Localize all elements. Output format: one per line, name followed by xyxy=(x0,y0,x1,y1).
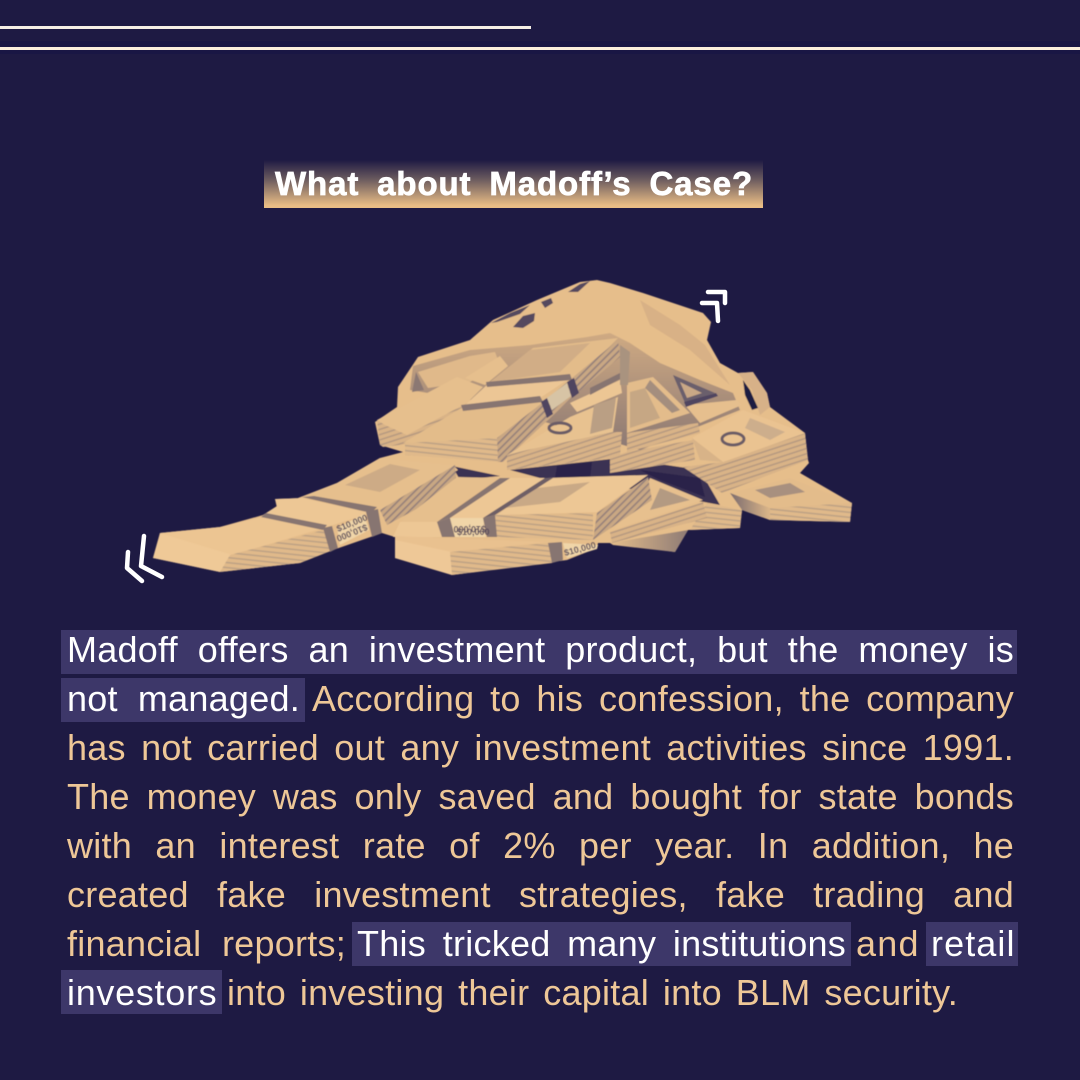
stack E behind right xyxy=(673,375,742,423)
icon: top right chevrons xyxy=(702,292,725,321)
line 2 rest: According to his confession, the company xyxy=(312,678,1014,719)
highlight line 8 xyxy=(61,970,222,1014)
body text block xyxy=(61,629,1018,1014)
line 6: created fake investment strategies, fake trading and xyxy=(67,874,1014,915)
sack rope xyxy=(738,372,770,415)
banknote label: $10,000 xyxy=(563,540,597,558)
stack M front centre xyxy=(395,536,598,575)
sack markings xyxy=(491,281,590,328)
highlight line 7 a xyxy=(352,922,851,966)
line 8 investors: investors xyxy=(67,972,217,1013)
seal xyxy=(722,433,744,445)
line 4: The money was only saved and bought for state bonds xyxy=(67,776,1014,817)
highlight line 7 b xyxy=(926,922,1018,966)
line 1: Madoff offers an investment product, but the money is xyxy=(67,629,1014,670)
line 7 start: financial reports; xyxy=(67,923,346,964)
banknote label xyxy=(453,524,490,537)
stack A left inside sack xyxy=(377,356,508,447)
stack L long lower left xyxy=(153,498,382,572)
banknote label xyxy=(335,512,369,544)
line 5: with an interest rate of 2% per year. In addition, he xyxy=(67,825,1014,866)
stack J centre with bands xyxy=(393,475,652,540)
banknote label: $10,000 xyxy=(457,527,490,537)
icon: bottom left chevrons xyxy=(127,536,162,581)
dark gaps between stacks xyxy=(452,458,720,505)
stack H low back xyxy=(690,503,742,530)
line 2 highlighted: not managed. xyxy=(67,678,300,719)
stack G lower right xyxy=(730,478,852,522)
line 7 and: and xyxy=(856,923,920,964)
sack inside shading xyxy=(410,333,740,450)
seal xyxy=(549,423,571,433)
line 3: has not carried out any investment activities since 1991. xyxy=(67,727,1014,768)
highlight line 1 xyxy=(61,630,1017,674)
stack K left upper xyxy=(277,458,458,525)
line 7 highlighted: This tricked many institutions xyxy=(357,923,846,964)
stack I right of centre xyxy=(610,478,707,543)
overall silhouette xyxy=(153,280,852,575)
title banner xyxy=(264,160,763,208)
line 7 retail: retail xyxy=(931,923,1016,964)
banknote label: $10,000 xyxy=(335,512,369,534)
stack F right with seal xyxy=(683,410,808,493)
stack under centre xyxy=(610,530,688,552)
top decorative rule short xyxy=(0,26,531,29)
highlight line 2 xyxy=(61,678,305,722)
stack D back centre xyxy=(610,345,700,473)
line 8 rest: into investing their capital into BLM security. xyxy=(227,972,958,1013)
banknote label: $10,000 xyxy=(335,522,369,544)
banknote label: $10,000 xyxy=(453,524,486,534)
stack B large banded xyxy=(403,338,620,462)
title text: What about Madoff’s Case? xyxy=(275,165,753,202)
stack C with seal xyxy=(507,372,622,470)
top decorative rule long xyxy=(0,47,1080,50)
